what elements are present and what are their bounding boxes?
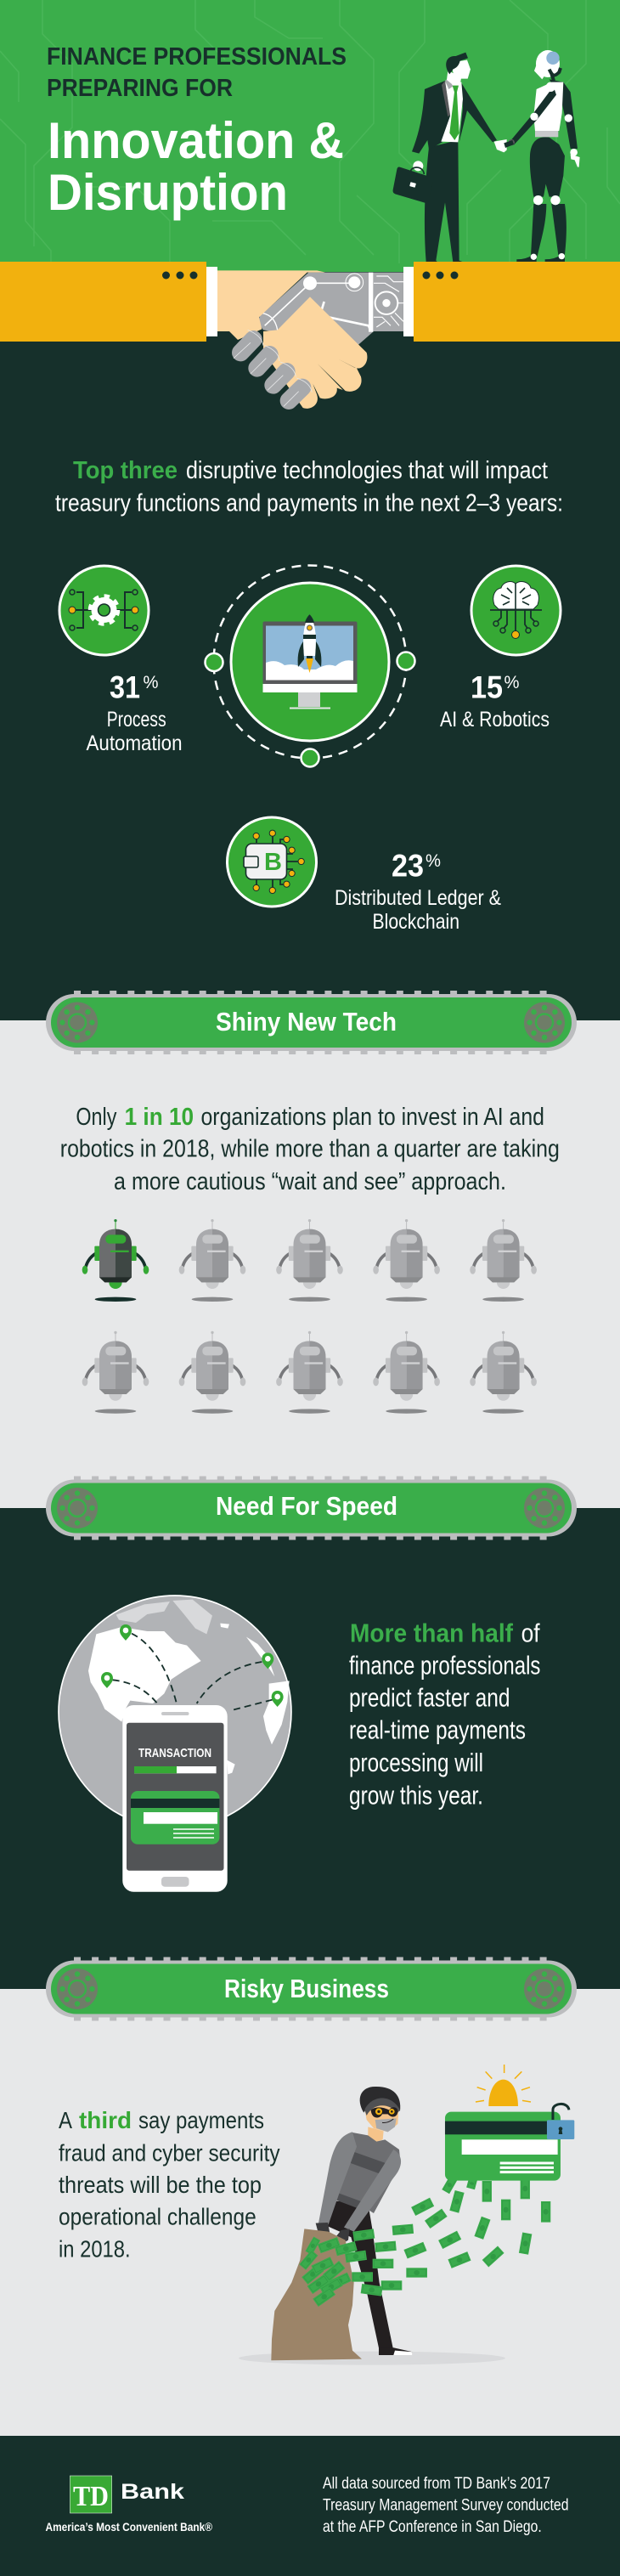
logo: td bank: [46, 2476, 212, 2534]
stat: 31 percent process automation: Process: [107, 708, 166, 732]
text block: 1 in 10 organizations: organizations plan to invest in AI and: [200, 1104, 544, 1131]
illustration: smartphone transaction screen: TRANSACTION: [138, 1746, 211, 1760]
text block: a third say: threats will be the top: [59, 2172, 262, 2198]
panel: dark footer: [0, 2436, 620, 2576]
text block: more than half: processing will: [349, 1748, 483, 1777]
icon: human and robot handshake: [217, 270, 403, 409]
stat: 31 percent process automation: Automation: [87, 732, 182, 755]
icon: blockchain wallet: B: [264, 849, 282, 876]
logo: td bank: Bank: [121, 2480, 184, 2504]
stack of bills: [299, 2176, 550, 2307]
logo: td bank: TD: [73, 2481, 109, 2512]
title: Innovation &: [48, 112, 344, 169]
text block: 1 in 10 organizations: Only: [76, 1104, 117, 1131]
icon: blockchain wallet: [228, 817, 316, 907]
stat: 15 percent ai and robotics: 15: [471, 669, 503, 705]
stat: 31 percent process automation: [87, 669, 182, 755]
text block: a third say: third: [79, 2107, 132, 2133]
heading: risky business: [46, 1959, 577, 2019]
credit card: [445, 2104, 574, 2181]
heading: need for speed: Need For Speed: [216, 1491, 397, 1521]
text block: more than half: [349, 1618, 540, 1810]
stat: 23 percent distributed ledger and blockchain: %: [426, 851, 441, 871]
text block: top three disruptive technologies: [55, 457, 563, 517]
text block: data source note: at the AFP Conference in San Diego.: [323, 2518, 542, 2536]
text block: 1 in 10 organizations: 1 in 10: [125, 1104, 194, 1131]
icon: process automation gear: [59, 566, 149, 655]
robot: [504, 50, 580, 263]
text block: more than half: More than half: [350, 1618, 514, 1648]
stat: 23 percent distributed ledger and blockchain: Distributed Ledger &: [335, 886, 501, 910]
illustration: businessman shaking hands with robot: [393, 50, 580, 263]
title: PREPARING FOR: [47, 75, 233, 102]
text block: data source note: [323, 2475, 569, 2536]
text block: a third say: [59, 2107, 280, 2262]
text block: more than half: of: [521, 1618, 540, 1648]
panel: light section shiny new tech: [0, 1020, 620, 1509]
heading: shiny new tech: [46, 992, 577, 1053]
text block: a third say: in 2018.: [59, 2236, 131, 2262]
panel: header green background: [0, 0, 620, 272]
stat: 31 percent process automation: %: [143, 673, 158, 692]
alarm light: [476, 2065, 531, 2106]
text block: data source note: Treasury Management Survey conducted: [323, 2497, 569, 2515]
panel: dark top section: [0, 272, 620, 1021]
icon: computer with rocket in dashed orbit: [206, 566, 414, 766]
logo: td bank: America’s Most Convenient Bank®: [46, 2521, 212, 2534]
stat: 15 percent ai and robotics: AI & Robotics: [440, 708, 550, 732]
icon: brain ai and robotics: [471, 566, 561, 655]
panel: light section risky business: [0, 1989, 620, 2437]
sleeve: left yellow cuff: [0, 262, 217, 342]
stat: 23 percent distributed ledger and blockchain: [335, 848, 501, 934]
text block: top three disruptive technologies: Top three: [73, 457, 178, 484]
panel: dark section need for speed: [0, 1508, 620, 1990]
illustration: thief stealing money from credit card: [239, 2065, 574, 2365]
businessman: [393, 53, 507, 262]
text block: more than half: real-time payments: [349, 1715, 526, 1745]
sack: [271, 2229, 362, 2360]
title: FINANCE PROFESSIONALS: [47, 43, 347, 71]
text block: more than half: predict faster and: [349, 1682, 510, 1712]
thief figure: [316, 2087, 413, 2355]
text block: 1 in 10 organizations: [60, 1104, 560, 1195]
icon: nine grey robots: [82, 1219, 537, 1414]
stat: 23 percent distributed ledger and blockchain: Blockchain: [372, 910, 459, 934]
stat: 15 percent ai and robotics: [440, 669, 550, 732]
text block: a third say: fraud and cyber security: [59, 2139, 280, 2166]
stat: 15 percent ai and robotics: %: [504, 673, 520, 692]
heading: shiny new tech: Shiny New Tech: [216, 1007, 397, 1037]
text block: data source note: All data sourced from TD Bank’s 2017: [323, 2475, 550, 2493]
illustration: globe with map pins: [59, 1596, 291, 1828]
stat: 23 percent distributed ledger and blockchain: 23: [392, 848, 424, 884]
text block: a third say: say payments: [138, 2107, 264, 2133]
title: Disruption: [48, 164, 288, 221]
sleeve: right yellow cuff: [403, 262, 620, 342]
heading: need for speed: [46, 1478, 577, 1538]
heading: risky business: Risky Business: [224, 1974, 389, 2003]
text block: more than half: grow this year.: [349, 1780, 483, 1810]
text block: top three disruptive technologies: disruptive technologies that will impact: [186, 457, 548, 484]
text block: a third say: A: [59, 2107, 72, 2133]
text block: a third say: operational challenge: [59, 2204, 256, 2230]
stat: 31 percent process automation: 31: [110, 669, 140, 705]
icon: highlighted green robot: [82, 1219, 149, 1302]
text block: 1 in 10 organizations: a more cautious “wait and see” approach.: [114, 1168, 506, 1195]
illustration: smartphone transaction screen: [122, 1705, 228, 1892]
text block: more than half: finance professionals: [349, 1651, 540, 1681]
title: [47, 43, 347, 221]
